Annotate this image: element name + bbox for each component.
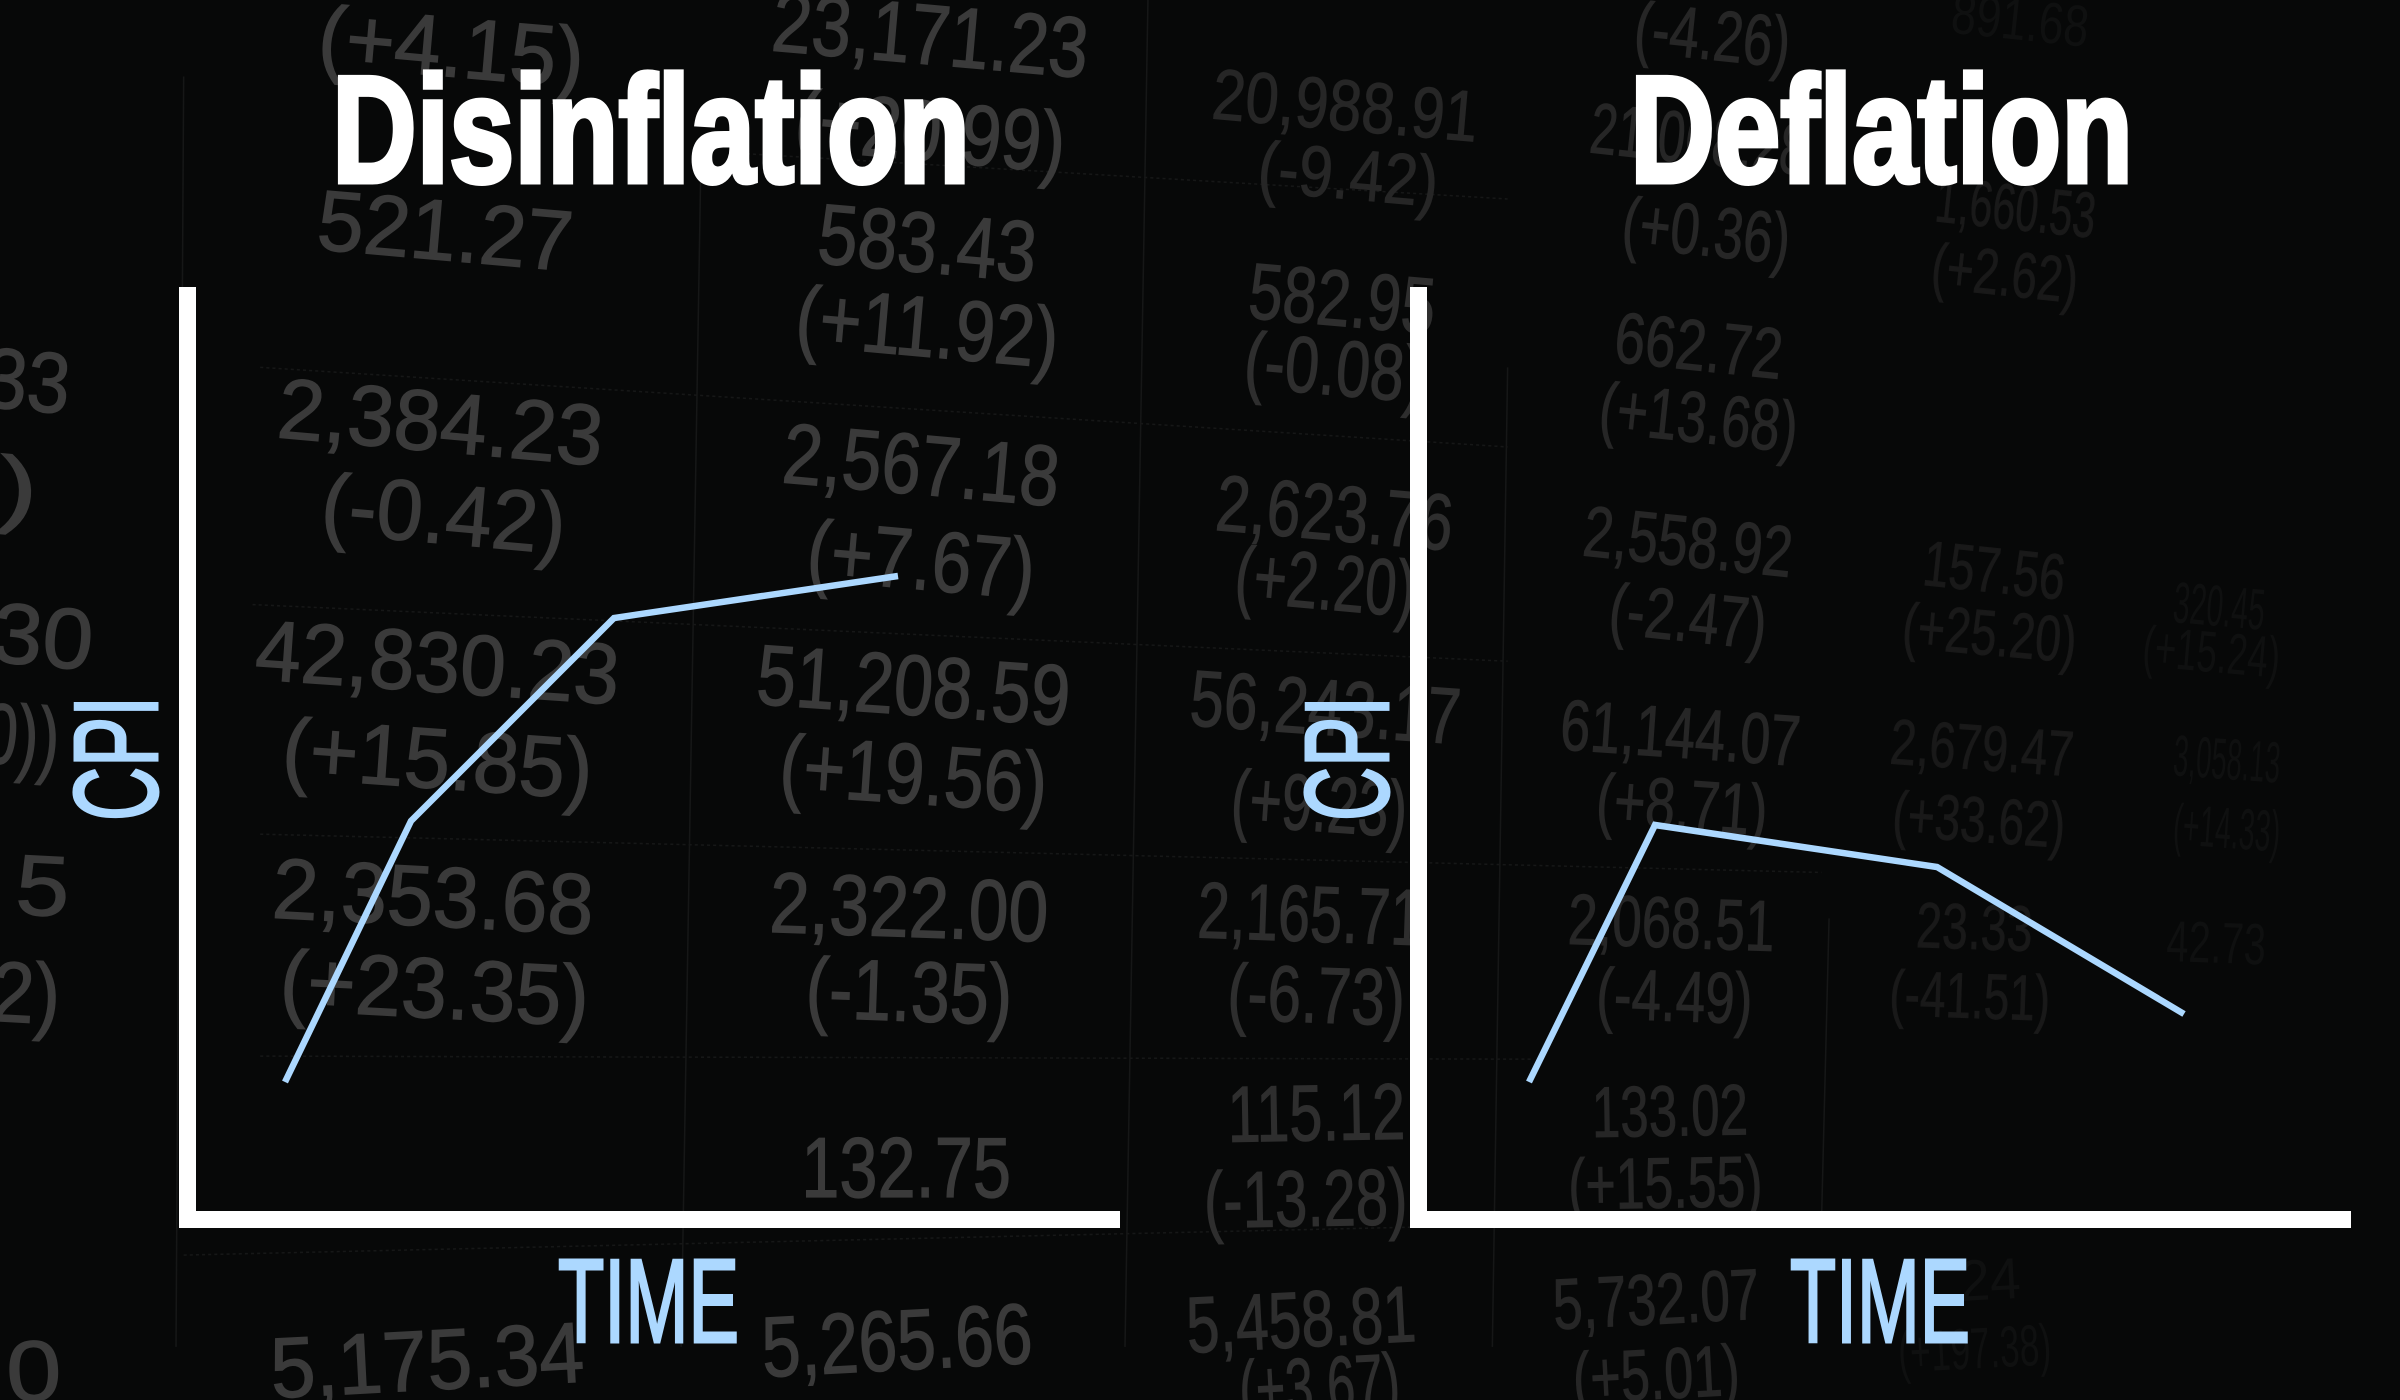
background: dark stock ticker board: 132.75	[801, 1120, 1011, 1216]
panel: deflation chart	[1281, 45, 2351, 1368]
background: dark stock ticker board: 2,165.71	[1196, 865, 1424, 962]
heading: Deflation: Deflation	[1630, 45, 2133, 215]
background: dark stock ticker board: 42.73	[2165, 909, 2267, 977]
background: dark stock ticker board: (+14.33)	[2171, 792, 2283, 865]
background: dark stock ticker board: (+7.67)	[804, 503, 1039, 618]
background: dark stock ticker board: 583.43	[814, 186, 1041, 301]
background: dark stock ticker board: 51,208.59	[754, 627, 1074, 745]
background: dark stock ticker board: 2,322.00	[768, 855, 1050, 961]
background: dark stock ticker board: (+15.24)	[2140, 614, 2283, 691]
background: dark stock ticker board: 20,988.91	[1209, 55, 1481, 158]
background: dark stock ticker board: 61,144.07	[1558, 685, 1803, 782]
line: CPI rising then falling	[1529, 825, 2184, 1082]
background: dark stock ticker board: 5,265.66	[759, 1286, 1035, 1396]
axes: left chart	[179, 287, 1120, 1228]
background: dark stock ticker board: 5	[14, 837, 72, 936]
background: dark stock ticker board: 2,558.92	[1580, 492, 1796, 593]
background: dark stock ticker board: (+197.38)	[1896, 1312, 2053, 1385]
background: dark stock ticker board: 42,830.23	[253, 602, 623, 723]
x axis label: TIME: TIME	[558, 1235, 739, 1368]
background: dark stock ticker board: (+11.92)	[792, 268, 1063, 387]
background: dark stock ticker board: 5,458.81	[1184, 1269, 1418, 1370]
background: dark stock ticker board: (-2.47)	[1605, 569, 1771, 665]
background: dark stock ticker board: (-6.73)	[1226, 947, 1407, 1043]
background: dark stock ticker board: 582.95	[1245, 246, 1439, 351]
background: dark stock ticker board: (-41.51)	[1888, 957, 2051, 1035]
background: dark stock ticker board: (+9.23)	[1228, 753, 1410, 854]
panel: disinflation chart	[50, 45, 1120, 1368]
background: dark stock ticker board: 2,384.23	[274, 360, 607, 485]
background: dark stock ticker board: (+15.55)	[1567, 1142, 1763, 1225]
background: dark stock ticker board: (-1.35)	[804, 940, 1014, 1043]
background: dark stock ticker board: 2,623.76	[1213, 458, 1457, 567]
background: dark stock ticker board: (+2.62)	[1928, 230, 2082, 317]
axes: right chart	[1410, 287, 2351, 1228]
background: dark stock ticker board: (+15.85)	[279, 701, 596, 818]
background: dark stock ticker board: (-13.28)	[1203, 1152, 1408, 1245]
background: dark stock ticker board: (+25.20)	[1900, 590, 2080, 677]
background: dark stock ticker board: (-0.08)	[1241, 315, 1429, 420]
background: dark stock ticker board: (+20.99)	[791, 72, 1070, 191]
background: dark stock ticker board: (+0.36)	[1619, 183, 1794, 280]
background: dark stock ticker board: (+8.71)	[1594, 760, 1770, 851]
line: CPI rising at a slowing rate	[285, 576, 898, 1082]
background: dark stock ticker board: 157.56	[1920, 527, 2069, 614]
y axis label: CPI: CPI	[1281, 696, 1414, 821]
background: dark stock ticker board: 2,353.68	[270, 841, 596, 953]
background: dark stock ticker board: 2,068.51	[1567, 880, 1776, 967]
background: dark stock ticker board: (-0.42)	[318, 456, 570, 573]
background: dark stock ticker board: 24	[1958, 1246, 2022, 1314]
background: dark stock ticker board: 23.33	[1915, 889, 2034, 965]
background: dark stock ticker board: 56,243.17	[1187, 653, 1464, 761]
background: dark stock ticker board: 133.02	[1591, 1070, 1749, 1153]
background: dark stock ticker board: (+23.35)	[278, 933, 591, 1045]
background: dark stock ticker board: 3,058.13	[2171, 723, 2283, 796]
background: dark stock ticker board: (-9.42)	[1255, 127, 1442, 223]
background: dark stock ticker board: (+33.62)	[1890, 778, 2068, 862]
background: dark stock ticker board: 115.12	[1227, 1067, 1406, 1159]
x axis label: TIME: TIME	[1790, 1235, 1970, 1368]
background: dark stock ticker board: 21,068.28	[1586, 89, 1811, 191]
background: dark stock ticker board: 2,679.47	[1888, 706, 2076, 790]
background: dark stock ticker board: 5,732.07	[1551, 1255, 1761, 1345]
background: dark stock ticker board: 320.45	[2171, 570, 2268, 643]
heading: Disinflation: Disinflation	[332, 45, 970, 215]
background: dark stock ticker board: 2,567.18	[779, 405, 1063, 525]
background: dark stock ticker board: (+2.20)	[1232, 529, 1419, 634]
background: dark stock ticker board: (-4.49)	[1595, 954, 1754, 1040]
background: dark stock ticker board: 662.72	[1611, 298, 1787, 395]
background: dark stock ticker board: 1,660.53	[1932, 163, 2099, 252]
y axis label: CPI: CPI	[50, 696, 183, 821]
background: dark stock ticker board: 521.27	[314, 172, 577, 290]
background: dark stock ticker board: (+13.68)	[1596, 368, 1802, 469]
background: dark stock ticker board: (+19.56)	[777, 717, 1051, 832]
